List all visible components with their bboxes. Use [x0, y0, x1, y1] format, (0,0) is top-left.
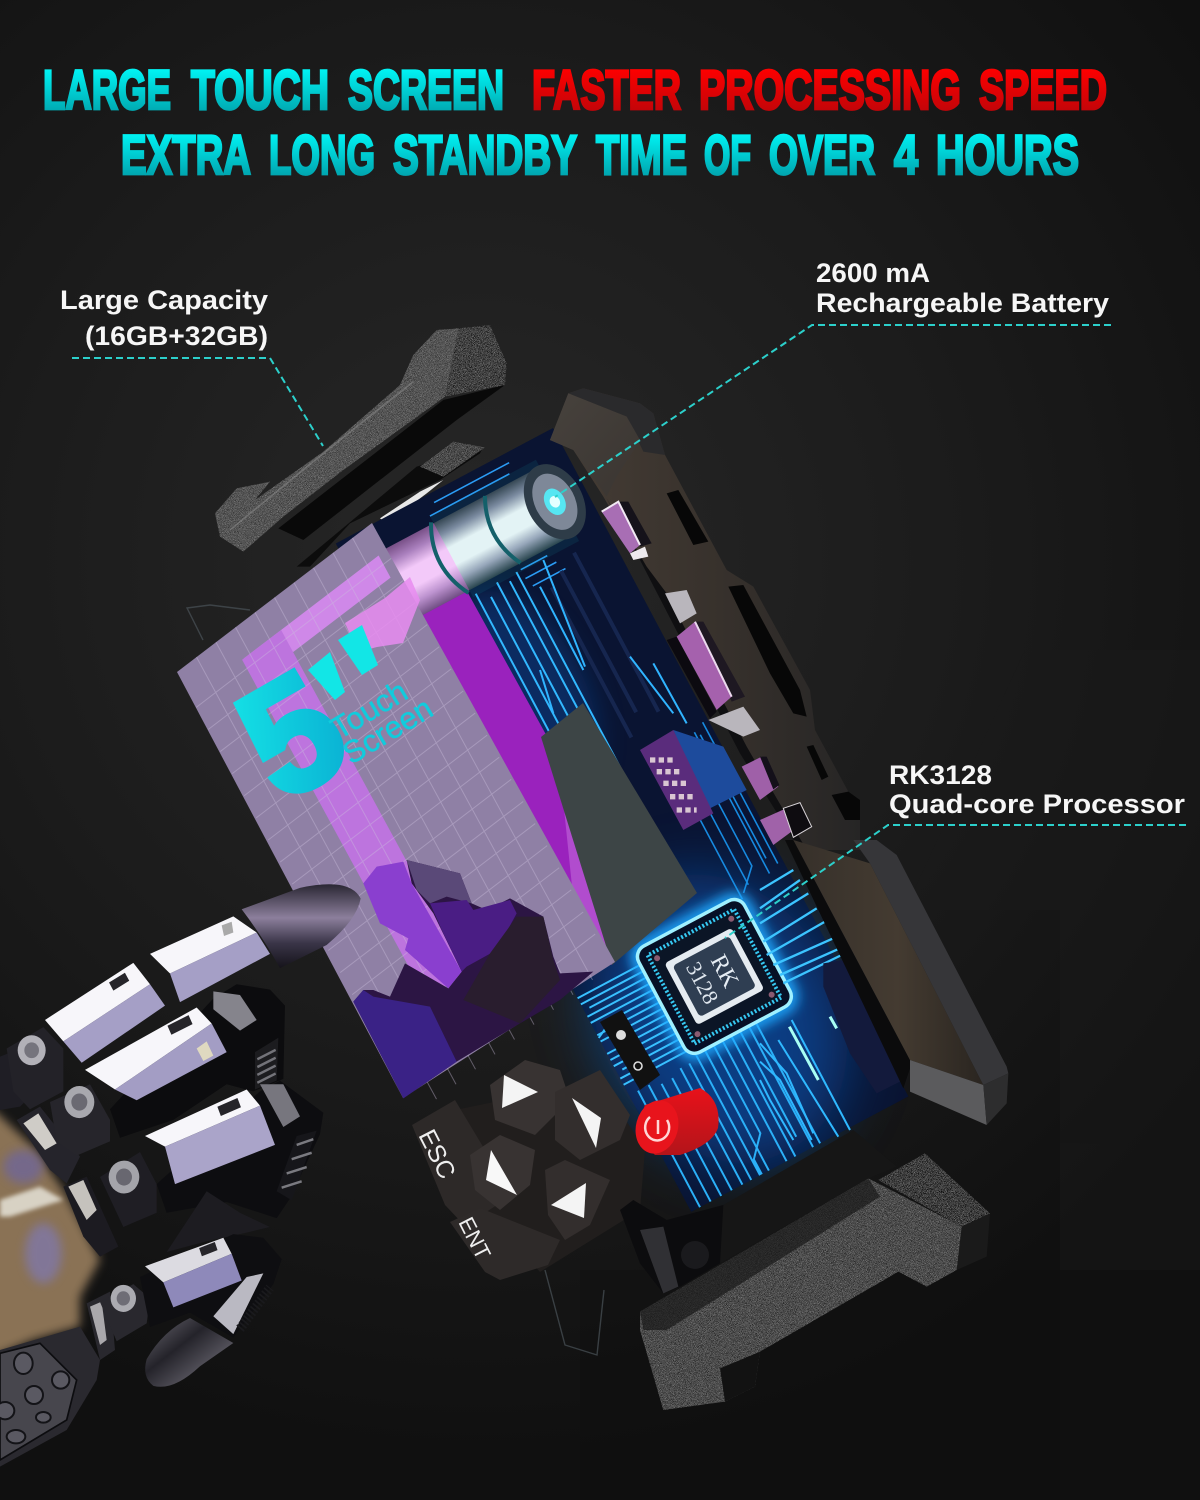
callout: battery	[555, 258, 1111, 497]
ESC key	[412, 1100, 512, 1226]
5 inch label: Screen	[337, 690, 439, 771]
leader line	[72, 358, 323, 446]
heading: standby time: STANDBY	[393, 123, 577, 186]
clamp notch	[720, 1352, 760, 1402]
traces right of processor	[760, 870, 903, 1140]
metal cylinders	[0, 1050, 37, 1110]
red power button	[630, 1088, 719, 1159]
finger joints	[7, 1027, 157, 1341]
frame lower section	[785, 840, 1008, 1125]
magenta LCD layer	[386, 535, 612, 965]
bottom bracket clamp with post	[620, 1130, 990, 1410]
pin header	[640, 730, 747, 830]
chip model number: 3128	[681, 957, 724, 1008]
second finger box	[85, 1007, 227, 1100]
rear clamp bar	[297, 442, 485, 567]
battery seen through glass	[345, 577, 420, 652]
ESC key: ESC	[413, 1125, 461, 1184]
clamp end side	[957, 1213, 990, 1270]
small connectors	[742, 757, 812, 845]
purple silhouette	[353, 860, 593, 1098]
heading: standby time: EXTRA	[121, 123, 251, 186]
board traces by ports	[540, 560, 687, 723]
touch screen caption: Touch	[325, 673, 414, 746]
middle finger box	[145, 1090, 275, 1184]
processor glow frame	[633, 895, 796, 1058]
side slots	[667, 490, 860, 820]
wrist shell	[0, 1327, 100, 1467]
frame upper section	[540, 388, 860, 850]
5 inch label	[210, 625, 439, 833]
heading: standby time: TIME	[596, 123, 687, 186]
touch screen glass	[177, 523, 615, 1114]
thumb	[145, 1318, 233, 1387]
pink reflection	[244, 555, 391, 680]
callout: large capacity: (16GB+32GB)	[85, 321, 268, 351]
callout: large capacity	[60, 285, 323, 446]
left key	[470, 1135, 535, 1210]
palm and wrist	[0, 1050, 118, 1467]
ENT key	[450, 1208, 560, 1280]
callout text: RK3128	[889, 760, 992, 790]
clamp underside	[278, 385, 505, 540]
callout: processor: Quad-core Processor	[889, 789, 1186, 819]
right key	[555, 1070, 630, 1160]
keypad	[412, 1060, 645, 1280]
heading: large touch screen: TOUCH	[191, 58, 329, 121]
clamp shaded band	[640, 1178, 880, 1330]
heading: large touch screen	[43, 58, 504, 121]
leader line	[555, 325, 1111, 497]
heading: faster processing speed: SPEED	[979, 58, 1107, 121]
top bracket clamp	[215, 325, 507, 567]
heading: standby time: 4	[894, 123, 918, 186]
down key	[545, 1160, 610, 1240]
processor chip	[672, 936, 756, 1017]
up key	[490, 1060, 570, 1135]
callout text: 2600 mA	[816, 258, 930, 288]
clamp body	[640, 1178, 962, 1410]
grey inner panel	[541, 703, 697, 965]
ENT key: ENT	[454, 1213, 496, 1263]
board glow	[544, 830, 896, 1208]
grid lines	[177, 523, 612, 1114]
clamp handle	[215, 328, 458, 552]
serial port	[665, 590, 760, 737]
clamp end top	[878, 1153, 990, 1227]
circuit traces	[340, 440, 903, 1212]
callout: battery: Rechargeable Battery	[816, 288, 1109, 318]
finger brackets	[110, 984, 323, 1338]
faint outline parts	[187, 605, 604, 1355]
heading: faster processing speed: PROCESSING	[699, 58, 961, 121]
heading: faster processing speed	[532, 58, 1107, 121]
heading: standby time: LONG	[269, 123, 375, 186]
gap panel	[703, 1130, 897, 1263]
heading: standby time: HOURS	[936, 123, 1079, 186]
heading: standby time: OF	[704, 123, 751, 186]
icon strip	[600, 1010, 660, 1090]
dark module	[823, 960, 903, 1093]
inch marks	[308, 652, 345, 700]
battery cylinder	[345, 448, 601, 642]
chip label: RK	[705, 950, 744, 993]
callout text: Large Capacity	[60, 285, 268, 315]
ring finger box	[145, 1238, 242, 1307]
5 numeral: 5	[210, 637, 374, 833]
top cap	[568, 388, 665, 455]
robot hand	[0, 884, 361, 1467]
background watermark shape	[580, 650, 1200, 1500]
heading: faster processing speed: FASTER	[532, 58, 681, 121]
clamp end	[445, 325, 507, 397]
heading: standby time	[121, 123, 1079, 186]
index fingertip	[242, 884, 361, 968]
USB port	[602, 502, 652, 560]
heading: large touch screen: SCREEN	[348, 58, 504, 121]
index finger boxes	[45, 916, 270, 1063]
leader line	[725, 825, 1186, 938]
circuit board	[332, 428, 908, 1214]
heading: standby time: OVER	[769, 123, 875, 186]
frame post	[620, 1200, 723, 1293]
callout: processor	[725, 760, 1186, 938]
title	[43, 58, 1107, 186]
heading: large touch screen: LARGE	[43, 58, 171, 121]
